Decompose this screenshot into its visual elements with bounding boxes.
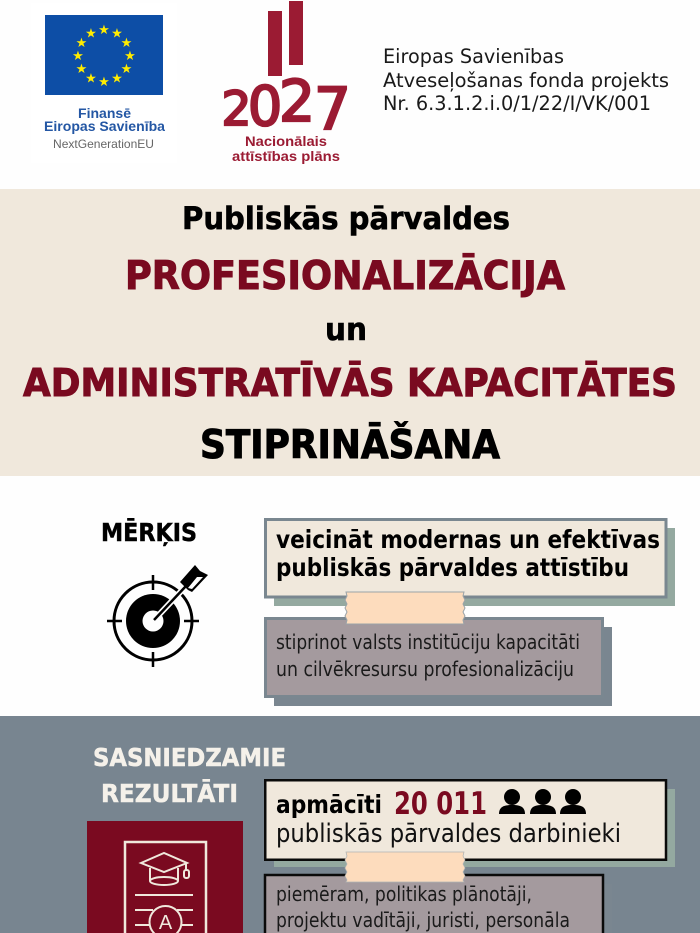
logo: National Development Plan 2027: attīstības plāns bbox=[232, 148, 340, 164]
panel: goal statement bbox=[266, 520, 675, 606]
number: trained staff: 20 011 bbox=[394, 786, 487, 822]
EU flag: ★ bbox=[85, 26, 97, 42]
logo: National Development Plan 2027: 2 bbox=[222, 82, 251, 137]
icon: diploma panel bbox=[87, 821, 243, 933]
title line 1: Publiskās pārvaldes bbox=[182, 201, 510, 237]
EU flag: ★ bbox=[76, 36, 87, 51]
EU flag: ★ bbox=[124, 49, 136, 64]
EU funding caption bbox=[44, 106, 165, 151]
panel: example roles bbox=[265, 875, 612, 933]
EU flag: ★ bbox=[98, 23, 110, 38]
panel: example roles: projektu vadītāji, juristi, personāla bbox=[276, 908, 570, 932]
heading: results: SASNIEDZAMIE bbox=[93, 743, 286, 772]
project information bbox=[383, 45, 669, 115]
EU flag: ★ bbox=[111, 26, 123, 42]
EU flag: ★ bbox=[121, 62, 132, 77]
panel: trained staff: publiskās pārvaldes darbinieki bbox=[276, 819, 621, 849]
EU flag: ★ bbox=[76, 62, 87, 77]
title line 4: ADMINISTRATĪVĀS KAPACITĀTES bbox=[23, 361, 677, 405]
EU flag bbox=[45, 15, 163, 95]
logo: National Development Plan 2027 bbox=[222, 1, 351, 164]
logo: National Development Plan 2027: 2 bbox=[279, 69, 315, 135]
project information: Atveseļošanas fonda projekts bbox=[383, 69, 669, 92]
EU flag: ★ bbox=[98, 75, 110, 90]
heading: goal: MĒRĶIS bbox=[101, 518, 197, 547]
EU funding caption: Finansē bbox=[78, 106, 132, 121]
title line 3: un bbox=[325, 312, 367, 348]
tape: results connector bbox=[345, 852, 465, 882]
EU funding caption: Eiropas Savienība bbox=[44, 119, 165, 134]
logo: National Development Plan 2027: 0 bbox=[248, 75, 282, 138]
logo: National Development Plan 2027: 7 bbox=[314, 75, 351, 143]
panel: example roles: piemēram, politikas plānotāji, bbox=[276, 882, 532, 906]
panel: goal statement: publiskās pārvaldes attīstību bbox=[276, 553, 629, 582]
heading: results bbox=[93, 743, 286, 808]
panel: trained staff: apmācīti bbox=[276, 790, 382, 819]
title line 2: PROFESIONALIZĀCIJA bbox=[125, 253, 565, 299]
EU flag: ★ bbox=[111, 72, 123, 86]
EU funding caption: NextGenerationEU bbox=[53, 137, 154, 151]
panel: results section bbox=[0, 716, 700, 933]
logo: EU funding bbox=[31, 3, 177, 163]
tape: goal connector bbox=[345, 592, 465, 624]
EU flag: ★ bbox=[85, 72, 97, 86]
project information: Nr. 6.3.1.2.i.0/1/22/I/VK/001 bbox=[383, 92, 651, 115]
EU flag: ★ bbox=[121, 36, 132, 51]
logo: National Development Plan 2027: Nacionālais bbox=[245, 133, 327, 149]
icon: people bbox=[499, 789, 586, 814]
panel: goal detail: stiprinot valsts institūciju kapacitāti bbox=[276, 630, 580, 654]
title line 5: STIPRINĀŠANA bbox=[200, 421, 500, 468]
EU flag: ★ bbox=[72, 49, 84, 64]
icon: target with arrow bbox=[107, 565, 208, 667]
panel: trained staff bbox=[265, 780, 675, 867]
project information: Eiropas Savienības bbox=[383, 45, 564, 68]
panel: goal detail: un cilvēkresursu profesionalizāciju bbox=[276, 657, 574, 681]
heading: results: REZULTĀTI bbox=[101, 779, 238, 808]
panel: title band bbox=[0, 189, 700, 476]
panel: goal detail bbox=[266, 618, 612, 706]
